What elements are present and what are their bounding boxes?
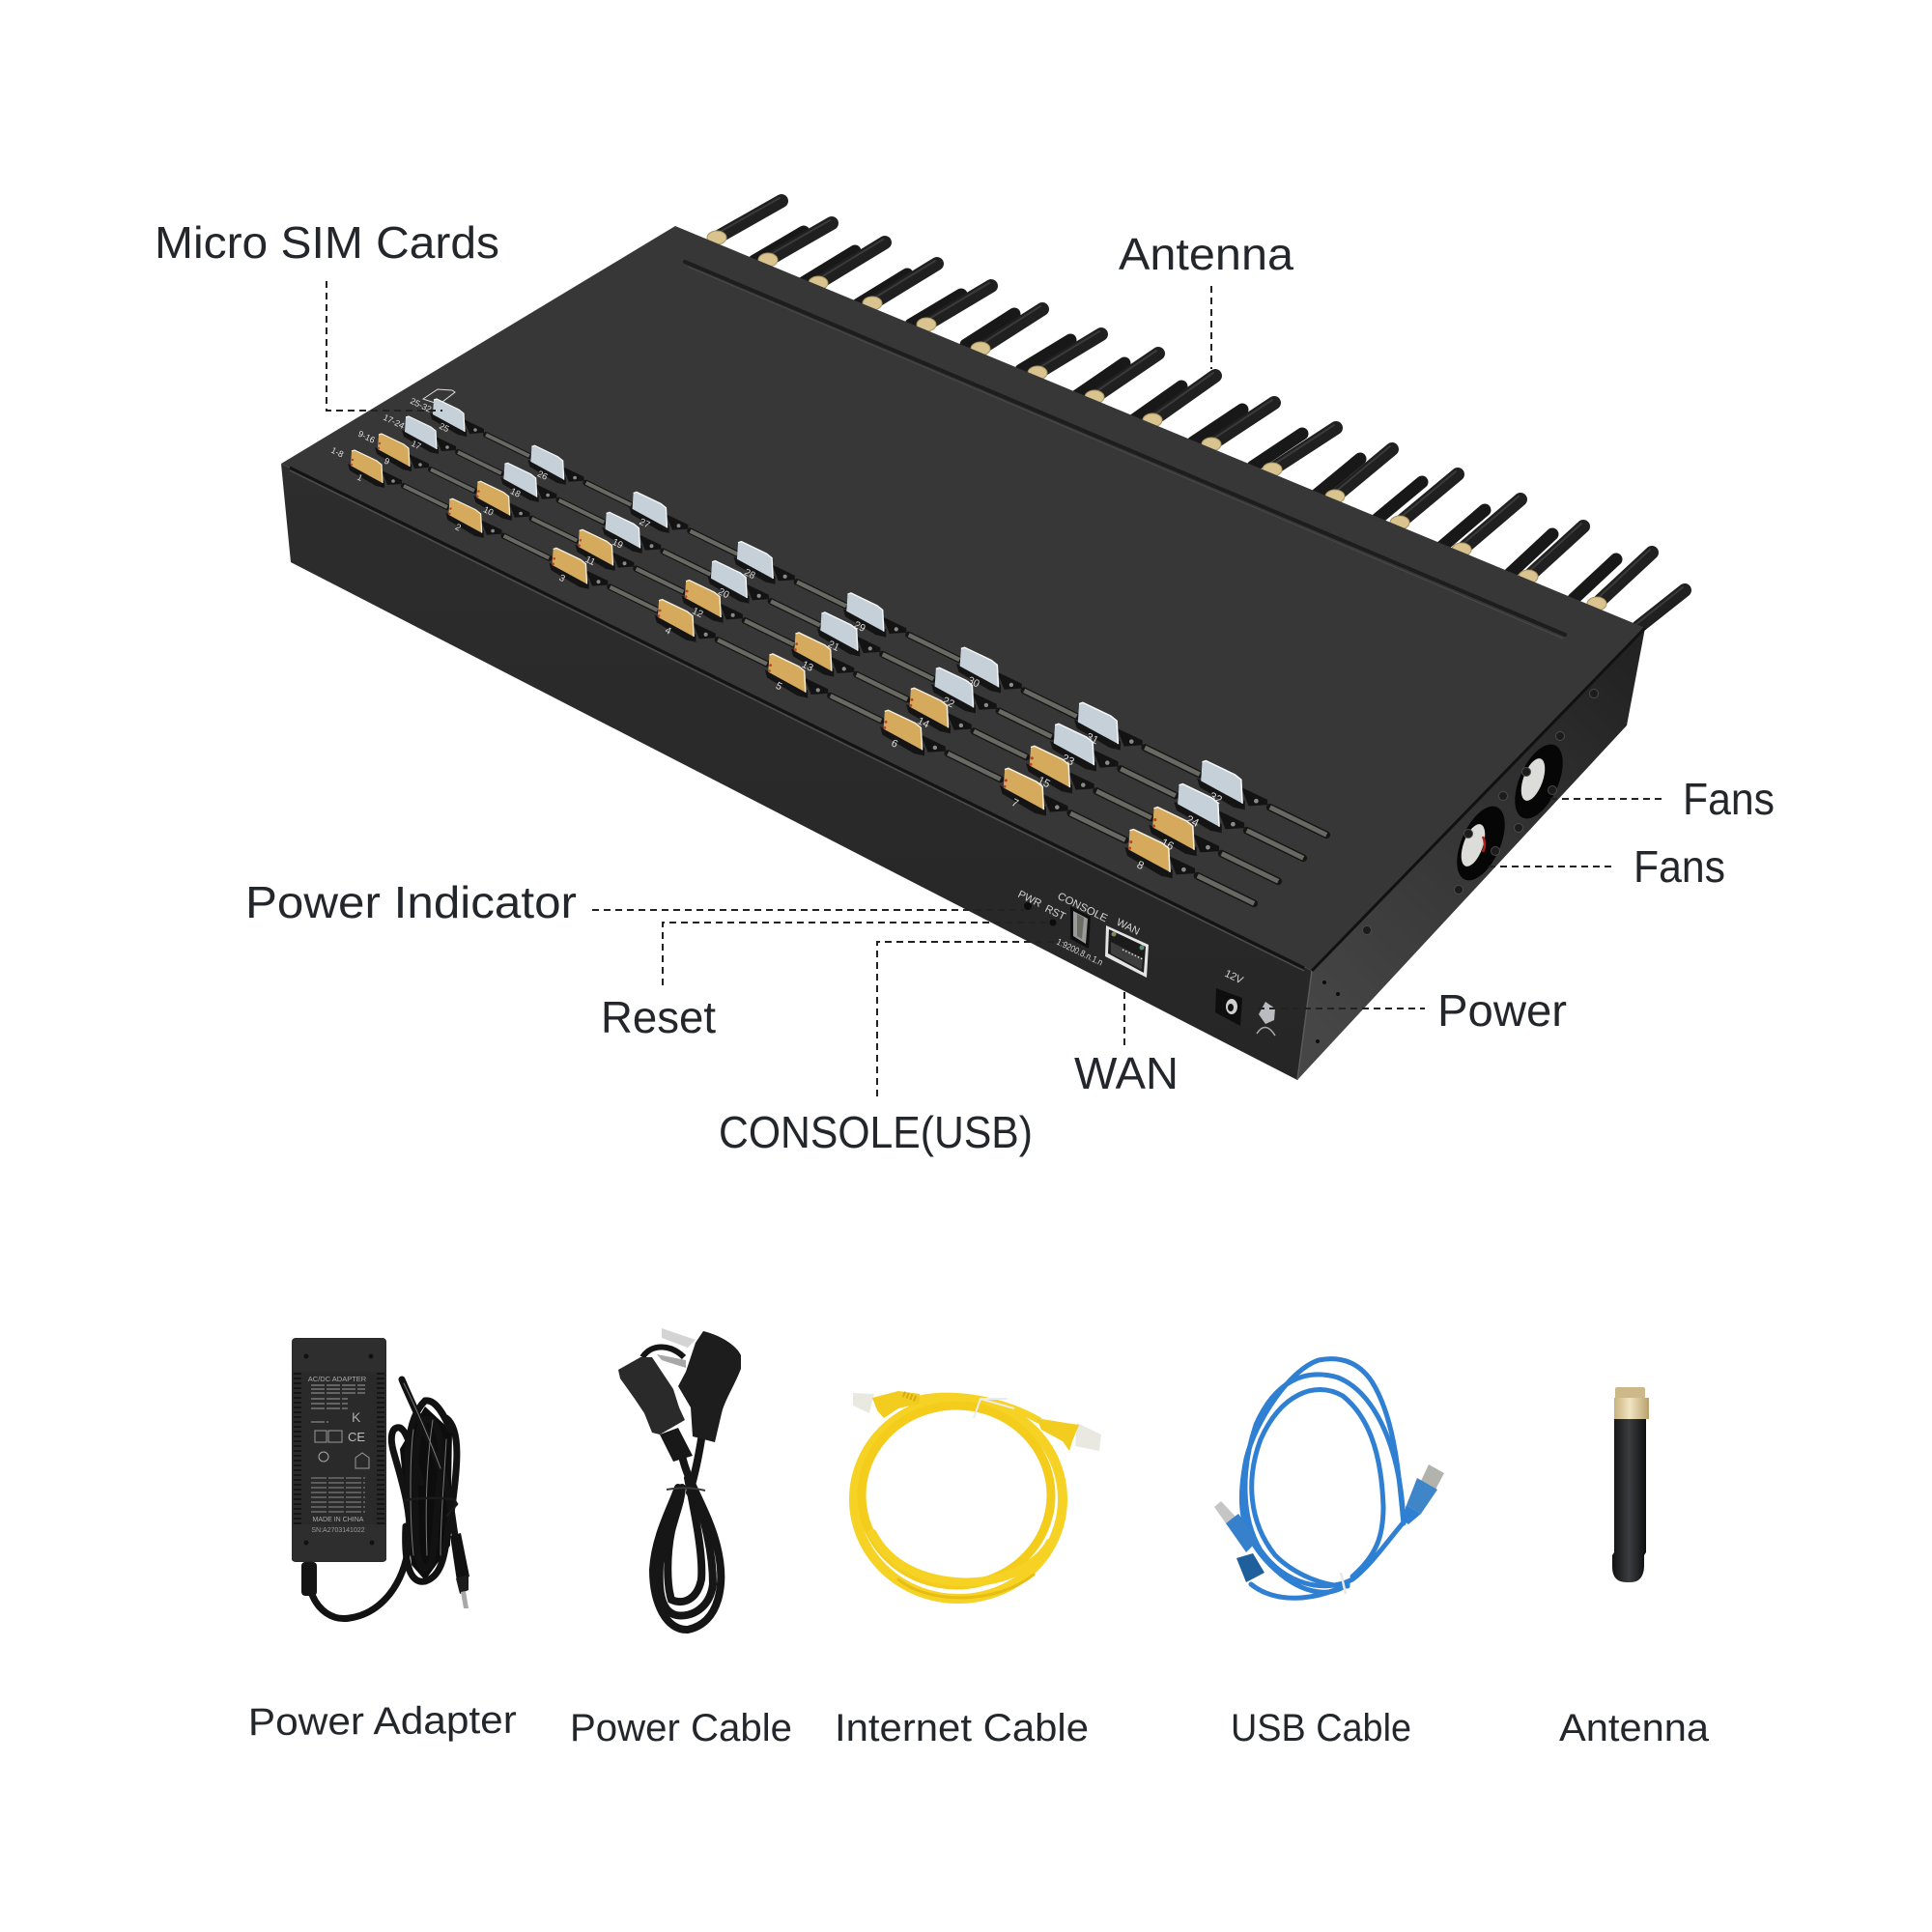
- label: USB Cable: USB Cable: [1231, 1707, 1411, 1749]
- SIM row 17-24: 20: [716, 586, 731, 601]
- adapter printed label: SN:A2703141022: [311, 1527, 365, 1534]
- power cable loops: [653, 1439, 721, 1630]
- SIM row 9-16: 16: [1159, 837, 1176, 853]
- front panel ports: 1:9200.8.n.1.n: [1055, 937, 1104, 968]
- side panel fans and screws: [1316, 690, 1598, 1043]
- accessory: antenna: [1612, 1387, 1649, 1582]
- USB port: [1070, 906, 1091, 949]
- SIM row 17-24: [402, 416, 1303, 858]
- SIM row 25-32: 27: [638, 517, 651, 531]
- dark arc behind plugs: [642, 1347, 684, 1357]
- callout leaders: [327, 281, 1663, 1096]
- adapter printed label: CE: [348, 1430, 365, 1444]
- front panel ports: [1016, 889, 1275, 1036]
- side top lip: [1297, 628, 1645, 1080]
- front panel ports: PWR: [1016, 889, 1043, 910]
- ground sticker icon: [1257, 1002, 1275, 1036]
- adapter cable bundle: [310, 1379, 457, 1619]
- SIM row 9-16: 10: [482, 504, 495, 518]
- SIM row 25-32: 30: [966, 674, 981, 691]
- adapter end caps: [292, 1339, 386, 1561]
- side screws: [1362, 690, 1598, 935]
- SIM row 1-8: 1: [355, 472, 364, 483]
- front panel ports: RST: [1043, 903, 1067, 923]
- SIM row 9-16: 9: [383, 456, 391, 467]
- label: Fans lower: Fans: [1634, 841, 1725, 892]
- SIM row 25-32: 29: [852, 619, 867, 635]
- adapter ribs: [298, 1373, 381, 1524]
- SIM row 25-32: 32: [1208, 790, 1224, 807]
- front panel ports: WAN: [1115, 917, 1142, 938]
- SIM row 9-16: 13: [800, 659, 815, 674]
- adapter printed label: AC/DC ADAPTER: [308, 1375, 367, 1383]
- adapter printed label: K: [352, 1409, 361, 1425]
- SIM row 1-8: [348, 450, 1254, 903]
- SIM row 17-24: 23: [1060, 753, 1076, 768]
- adapter strain relief: [301, 1562, 317, 1596]
- SIM row 17-24: 17: [410, 439, 423, 451]
- left RJ45 connector: [853, 1391, 920, 1418]
- label: Reset: Reset: [601, 992, 716, 1042]
- DC power jack: [1215, 988, 1242, 1026]
- SIM row 9-16: 11: [583, 554, 597, 568]
- label: Fans upper: Fans: [1683, 774, 1775, 824]
- USB cable loops: [1241, 1359, 1408, 1598]
- label: Power Indicator: Power Indicator: [245, 877, 577, 927]
- front face: [281, 464, 1312, 1080]
- antenna brass connector: [1614, 1387, 1649, 1419]
- SIM row 1-8: 5: [774, 680, 784, 693]
- SIM row 1-8: 8: [1135, 859, 1146, 872]
- adapter body: [292, 1338, 386, 1562]
- accessory: internet cable: [853, 1391, 1101, 1599]
- label: WAN: WAN: [1074, 1048, 1179, 1098]
- fan A: [1447, 799, 1515, 888]
- label: CONSOLE(USB): CONSOLE(USB): [719, 1107, 1033, 1157]
- SIM row 17-24: 22: [941, 695, 956, 711]
- front panel ports: CONSOLE: [1056, 891, 1109, 924]
- accessory: USB cable: [1214, 1359, 1444, 1598]
- row labels and SIM icon: 1-8: [329, 445, 345, 460]
- SIM row 25-32: 26: [536, 469, 549, 482]
- fan B: [1505, 737, 1573, 826]
- front panel ports: 12V: [1223, 968, 1245, 987]
- SIM row 1-8: 3: [557, 573, 567, 584]
- SIM row 1-8: 6: [890, 737, 899, 751]
- accessory: power adapter: [292, 1338, 469, 1619]
- USB cable tie: [1341, 1573, 1346, 1594]
- SIM row 25-32: 31: [1084, 731, 1100, 747]
- SIM row 17-24: 19: [611, 537, 624, 552]
- WAN port: [1105, 925, 1149, 978]
- adapter tie: [404, 1498, 457, 1517]
- adapter DC plug: [450, 1533, 469, 1608]
- SIM row 9-16: 14: [916, 715, 931, 731]
- USB-B plug: [1214, 1501, 1264, 1582]
- SIM row 1-8: 4: [663, 625, 673, 638]
- SIM row 17-24: 18: [509, 486, 522, 499]
- antennas: [707, 198, 1685, 627]
- C13 strain relief: [660, 1428, 693, 1462]
- C13 connector: [618, 1357, 685, 1435]
- SIM row 25-32: 28: [742, 567, 757, 582]
- label: Power: Power: [1437, 985, 1567, 1036]
- adapter printed label: MADE IN CHINA: [313, 1517, 364, 1523]
- row labels and SIM icon: 17-24: [382, 412, 406, 431]
- top front lip: [290, 468, 1304, 971]
- USB-A plug: [1401, 1464, 1444, 1524]
- label: Antenna accessory: Antenna: [1559, 1707, 1710, 1749]
- accessory: power cable: [618, 1328, 741, 1630]
- top face: [281, 226, 1645, 971]
- cable tie: [974, 1399, 1014, 1418]
- SIM row 1-8: 2: [454, 522, 463, 533]
- adapter printed label: [308, 1375, 369, 1534]
- power plug prongs: [657, 1328, 696, 1368]
- label: Power Cable: Power Cable: [570, 1707, 792, 1749]
- right RJ45 connector: [1037, 1418, 1101, 1451]
- SIM row 9-16: [375, 434, 1278, 881]
- row labels and SIM icon: [329, 389, 455, 460]
- cable loops: [854, 1396, 1063, 1599]
- SIM row 17-24: 21: [826, 639, 841, 654]
- label: Antenna: Antenna: [1119, 229, 1293, 279]
- SIM row 17-24: 24: [1184, 813, 1202, 830]
- side face: [1297, 628, 1645, 1080]
- device: SIM gateway: [281, 198, 1685, 1080]
- SIM row 25-32: 25: [438, 421, 451, 434]
- label: Internet Cable: Internet Cable: [835, 1707, 1089, 1749]
- label: Power Adapter: Power Adapter: [248, 1699, 517, 1744]
- power cable tie: [667, 1488, 705, 1491]
- label: Micro SIM Cards: Micro SIM Cards: [155, 217, 499, 268]
- SIM row 9-16: 12: [690, 606, 705, 620]
- SIM row 9-16: 15: [1036, 775, 1052, 790]
- power plug body: [678, 1331, 741, 1442]
- SIM row 25-32: [430, 399, 1326, 835]
- row labels and SIM icon: 9-16: [356, 429, 377, 445]
- row labels and SIM icon: 25-32: [409, 396, 433, 414]
- antenna body: [1612, 1419, 1646, 1582]
- SIM row 1-8: 7: [1009, 797, 1020, 810]
- top groove: [685, 262, 1565, 639]
